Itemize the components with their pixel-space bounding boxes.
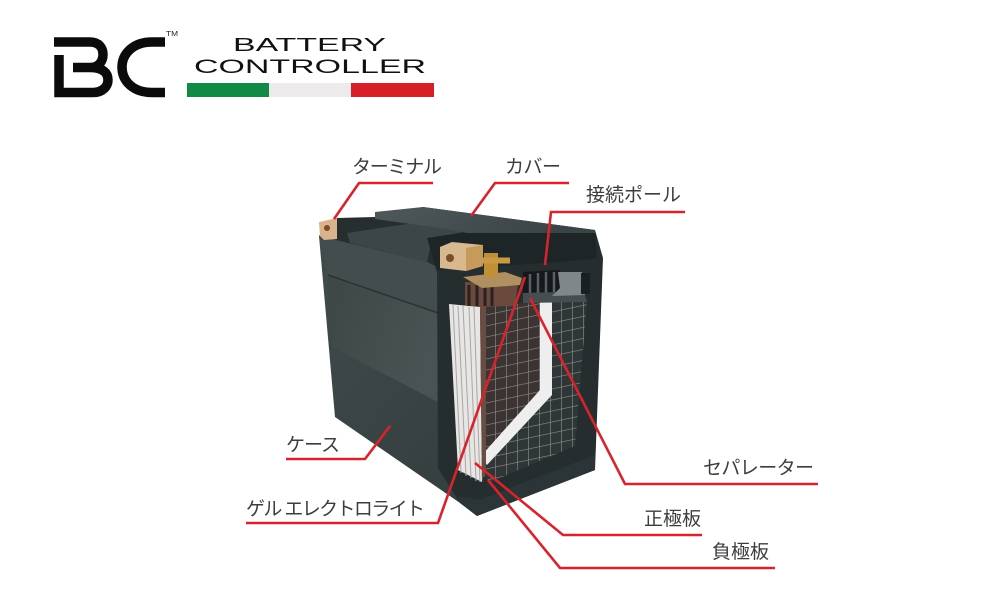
- label: connection pole: 接続ポール: [586, 184, 681, 206]
- label: case: ケース: [286, 435, 340, 456]
- case left face: [319, 236, 460, 503]
- label: positive plate: 正極板: [644, 508, 701, 530]
- terminal cube left: [319, 218, 337, 240]
- line: negative plate: [488, 480, 775, 568]
- logo text: CONTROLLER: CONTROLLER: [194, 57, 426, 78]
- battery top recess: [319, 207, 603, 275]
- battery cover: [375, 207, 595, 233]
- logo mark: BC: [54, 31, 178, 92]
- separator white strip: [481, 300, 552, 465]
- logo text: BATTERY: BATTERY: [233, 35, 386, 55]
- dark cover mass: [427, 232, 597, 285]
- label: negative plate: 負極板: [712, 541, 769, 563]
- logo: BC Battery Controller: [54, 31, 434, 97]
- case front frame: [437, 258, 603, 516]
- line: terminal: [334, 183, 433, 219]
- label: terminal: ターミナル: [352, 156, 442, 178]
- positive lugs: [463, 272, 522, 307]
- case upper band: [319, 236, 438, 313]
- logo mark: BC: TM: [166, 31, 178, 38]
- copper post: [480, 253, 510, 277]
- frame bottom lip: [458, 455, 595, 516]
- line: connection pole: [545, 212, 685, 265]
- terminal cube right: [440, 242, 483, 271]
- line: cover: [471, 183, 569, 216]
- line: gel electrolyte: [246, 277, 525, 523]
- plate stack: [449, 304, 486, 482]
- battery cutaway illustration: [319, 207, 603, 516]
- callout lines: [246, 183, 818, 568]
- recess inner ledge: [347, 222, 463, 262]
- line: separator: [530, 298, 818, 484]
- negative lugs: [523, 270, 590, 303]
- inner grid panel: [478, 300, 587, 482]
- tricolour flag bar: [187, 83, 434, 97]
- line: positive plate: [475, 463, 702, 535]
- label: separator: セパレーター: [703, 457, 814, 479]
- label: gel electrolyte: ゲル エレクトロライト: [246, 498, 425, 520]
- label: cover: カバー: [505, 157, 561, 178]
- line: case: [286, 426, 390, 459]
- case upper crease: [328, 275, 438, 402]
